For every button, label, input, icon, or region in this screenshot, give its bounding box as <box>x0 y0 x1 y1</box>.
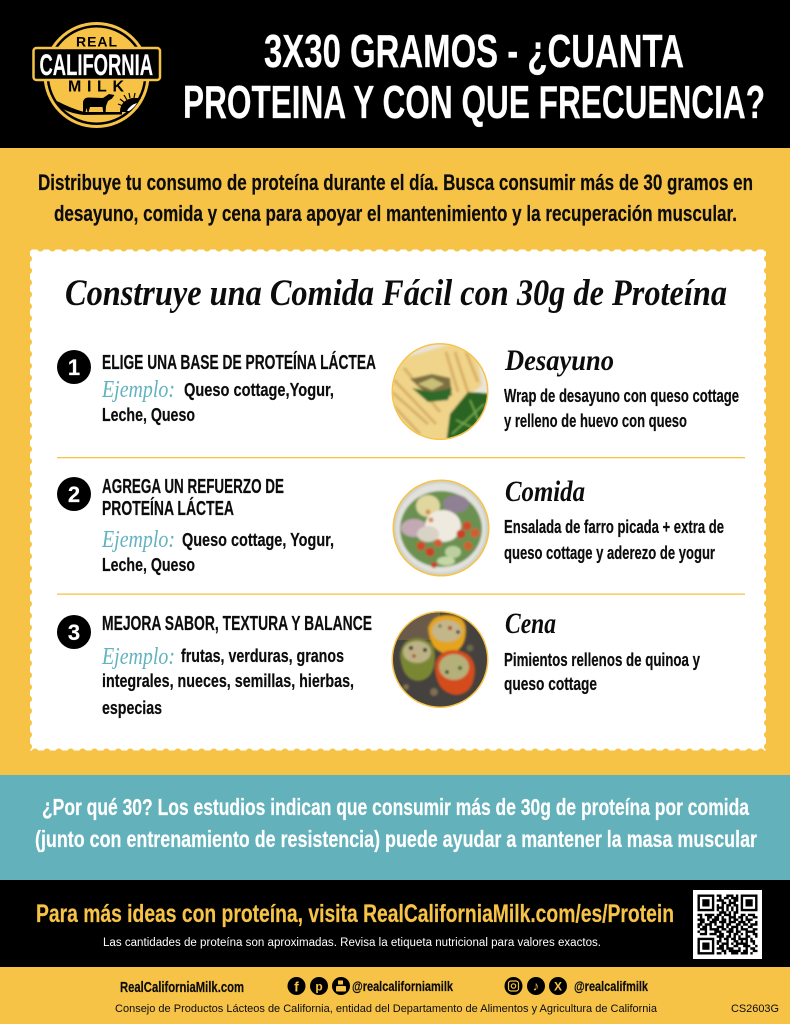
step 3 <box>57 613 372 718</box>
credit line: Consejo de Productos Lácteos de California, entidad del Departamento de Alimentos y Agricultura de California <box>115 1003 658 1015</box>
step 1 text: Ejemplo: <box>101 377 175 403</box>
QR code <box>693 890 762 959</box>
photo: farro salad <box>390 478 492 580</box>
website: RealCaliforniaMilk.com <box>120 980 244 996</box>
step 3 text: integrales, nueces, semillas, hierbas, <box>102 670 354 691</box>
step 3 text: MEJORA SABOR, TEXTURA Y BALANCE <box>102 613 372 635</box>
number badge 1 <box>57 350 91 384</box>
icons: instagram tiktok x <box>504 977 567 995</box>
step 3 text: especias <box>102 697 162 718</box>
handle: realcaliforniamilk: @realcaliforniamilk <box>352 978 453 994</box>
photo: breakfast wrap <box>388 342 490 444</box>
step 1 text: Leche, Queso <box>102 404 195 425</box>
step 2 text <box>101 476 334 575</box>
step 3 text: frutas, verduras, granos <box>181 645 344 666</box>
logo: Real California Milk <box>34 22 160 128</box>
meal: breakfast: Desayuno <box>504 344 614 377</box>
step 1 <box>57 350 376 425</box>
icons: instagram tiktok x: X <box>554 980 562 994</box>
photo: stuffed peppers <box>390 610 490 710</box>
step 3 text <box>101 613 372 718</box>
step 1 text: Queso cottage,Yogur, <box>184 379 334 400</box>
logo: Real California Milk: REAL <box>76 34 117 50</box>
step 2 text: PROTEÍNA LÁCTEA <box>102 497 234 520</box>
icons: instagram tiktok x: ♪ <box>533 978 539 994</box>
step 2 text: Leche, Queso <box>102 554 195 575</box>
disclaimer: Las cantidades de proteína son aproximadas. Revisa la etiqueta nutricional para valores exactos. <box>103 937 601 949</box>
number badge 3 <box>57 615 91 649</box>
meal: breakfast: y relleno de huevo con queso <box>504 411 687 431</box>
step 2 text: AGREGA UN REFUERZO DE <box>102 476 284 498</box>
code: CS2603G <box>731 1003 779 1015</box>
step 2 <box>57 476 334 575</box>
title <box>183 25 765 128</box>
panel: build a meal <box>28 248 768 752</box>
meal: lunch: queso cottage y aderezo de yogur <box>504 543 715 563</box>
number badge 2: 2 <box>68 482 80 507</box>
handle: realcalifmilk: @realcalifmilk <box>574 978 648 994</box>
band: more ideas <box>0 880 790 967</box>
callout: why 30 <box>0 775 790 880</box>
meal: lunch: Comida <box>505 475 585 508</box>
logo: Real California Milk: MILK <box>68 79 124 96</box>
step 1 text <box>101 351 376 425</box>
header band <box>0 0 790 148</box>
logo: Real California Milk: CALIFORNIA <box>40 49 153 82</box>
step 3 text: Ejemplo: <box>101 644 175 670</box>
step 2 text: Queso cottage, Yogur, <box>182 529 334 550</box>
meal: dinner: Pimientos rellenos de quinoa y <box>504 650 700 670</box>
meal: breakfast <box>504 344 739 431</box>
number badge 1: 1 <box>68 355 80 380</box>
meal: dinner: Cena <box>505 607 556 640</box>
meal: dinner: queso cottage <box>504 674 597 694</box>
meal: lunch <box>504 475 724 563</box>
step 2 text: Ejemplo: <box>101 527 175 553</box>
meal: dinner <box>504 607 700 694</box>
icons: facebook pinterest youtube: p <box>315 980 323 994</box>
icons: facebook pinterest youtube <box>288 977 350 995</box>
intro text <box>38 170 753 226</box>
icons: facebook pinterest youtube: f <box>294 978 299 994</box>
step 1 text: ELIGE UNA BASE DE PROTEÍNA LÁCTEA <box>102 351 376 374</box>
footer <box>115 977 779 1015</box>
number badge 3: 3 <box>68 620 80 645</box>
number badge 2 <box>57 477 91 511</box>
